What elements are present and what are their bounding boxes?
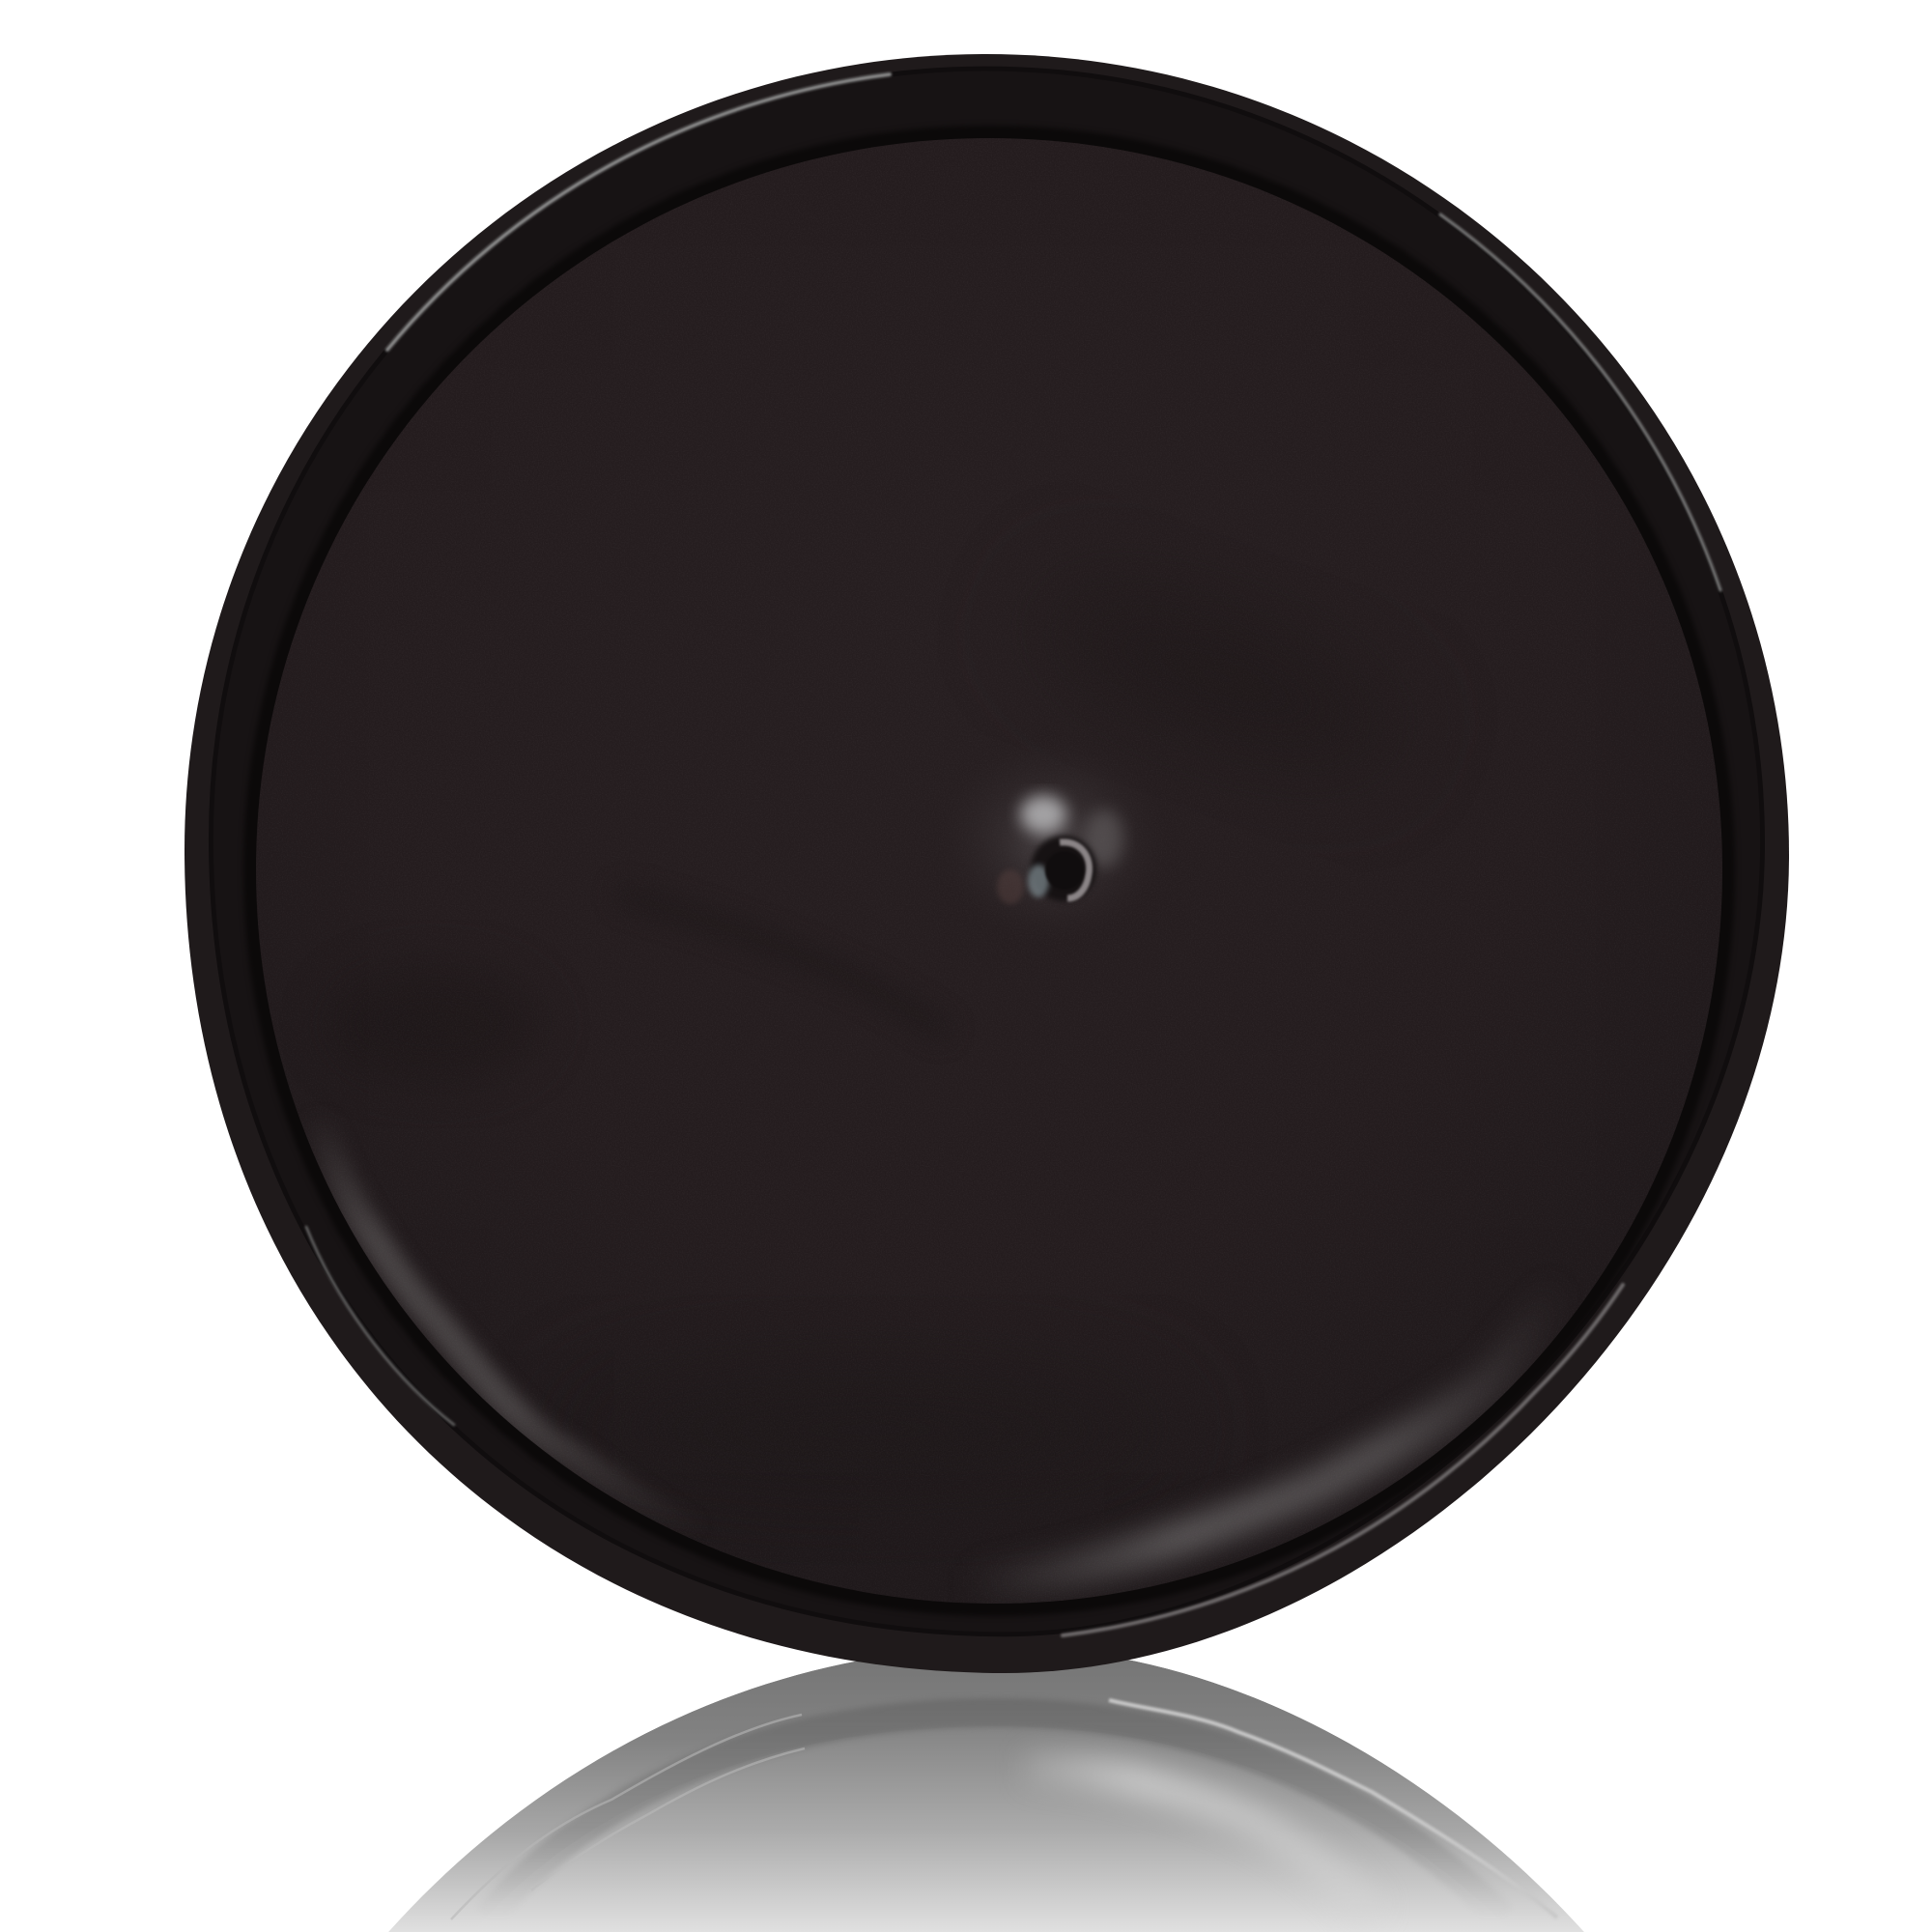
lid body: [185, 54, 1789, 1673]
recessed inner panel: [242, 126, 1739, 1613]
rim highlights: [306, 74, 1720, 1635]
centre dimple and wick hole: [937, 739, 1169, 942]
dark groove around the panel: [256, 138, 1722, 1604]
raised ridge band: [211, 69, 1763, 1634]
matte grain texture: [367, 449, 1569, 1568]
panel shading: [321, 1140, 1528, 1596]
reflection of the lid on the surface: [388, 1647, 1584, 1932]
outer rim: [185, 54, 1789, 1673]
